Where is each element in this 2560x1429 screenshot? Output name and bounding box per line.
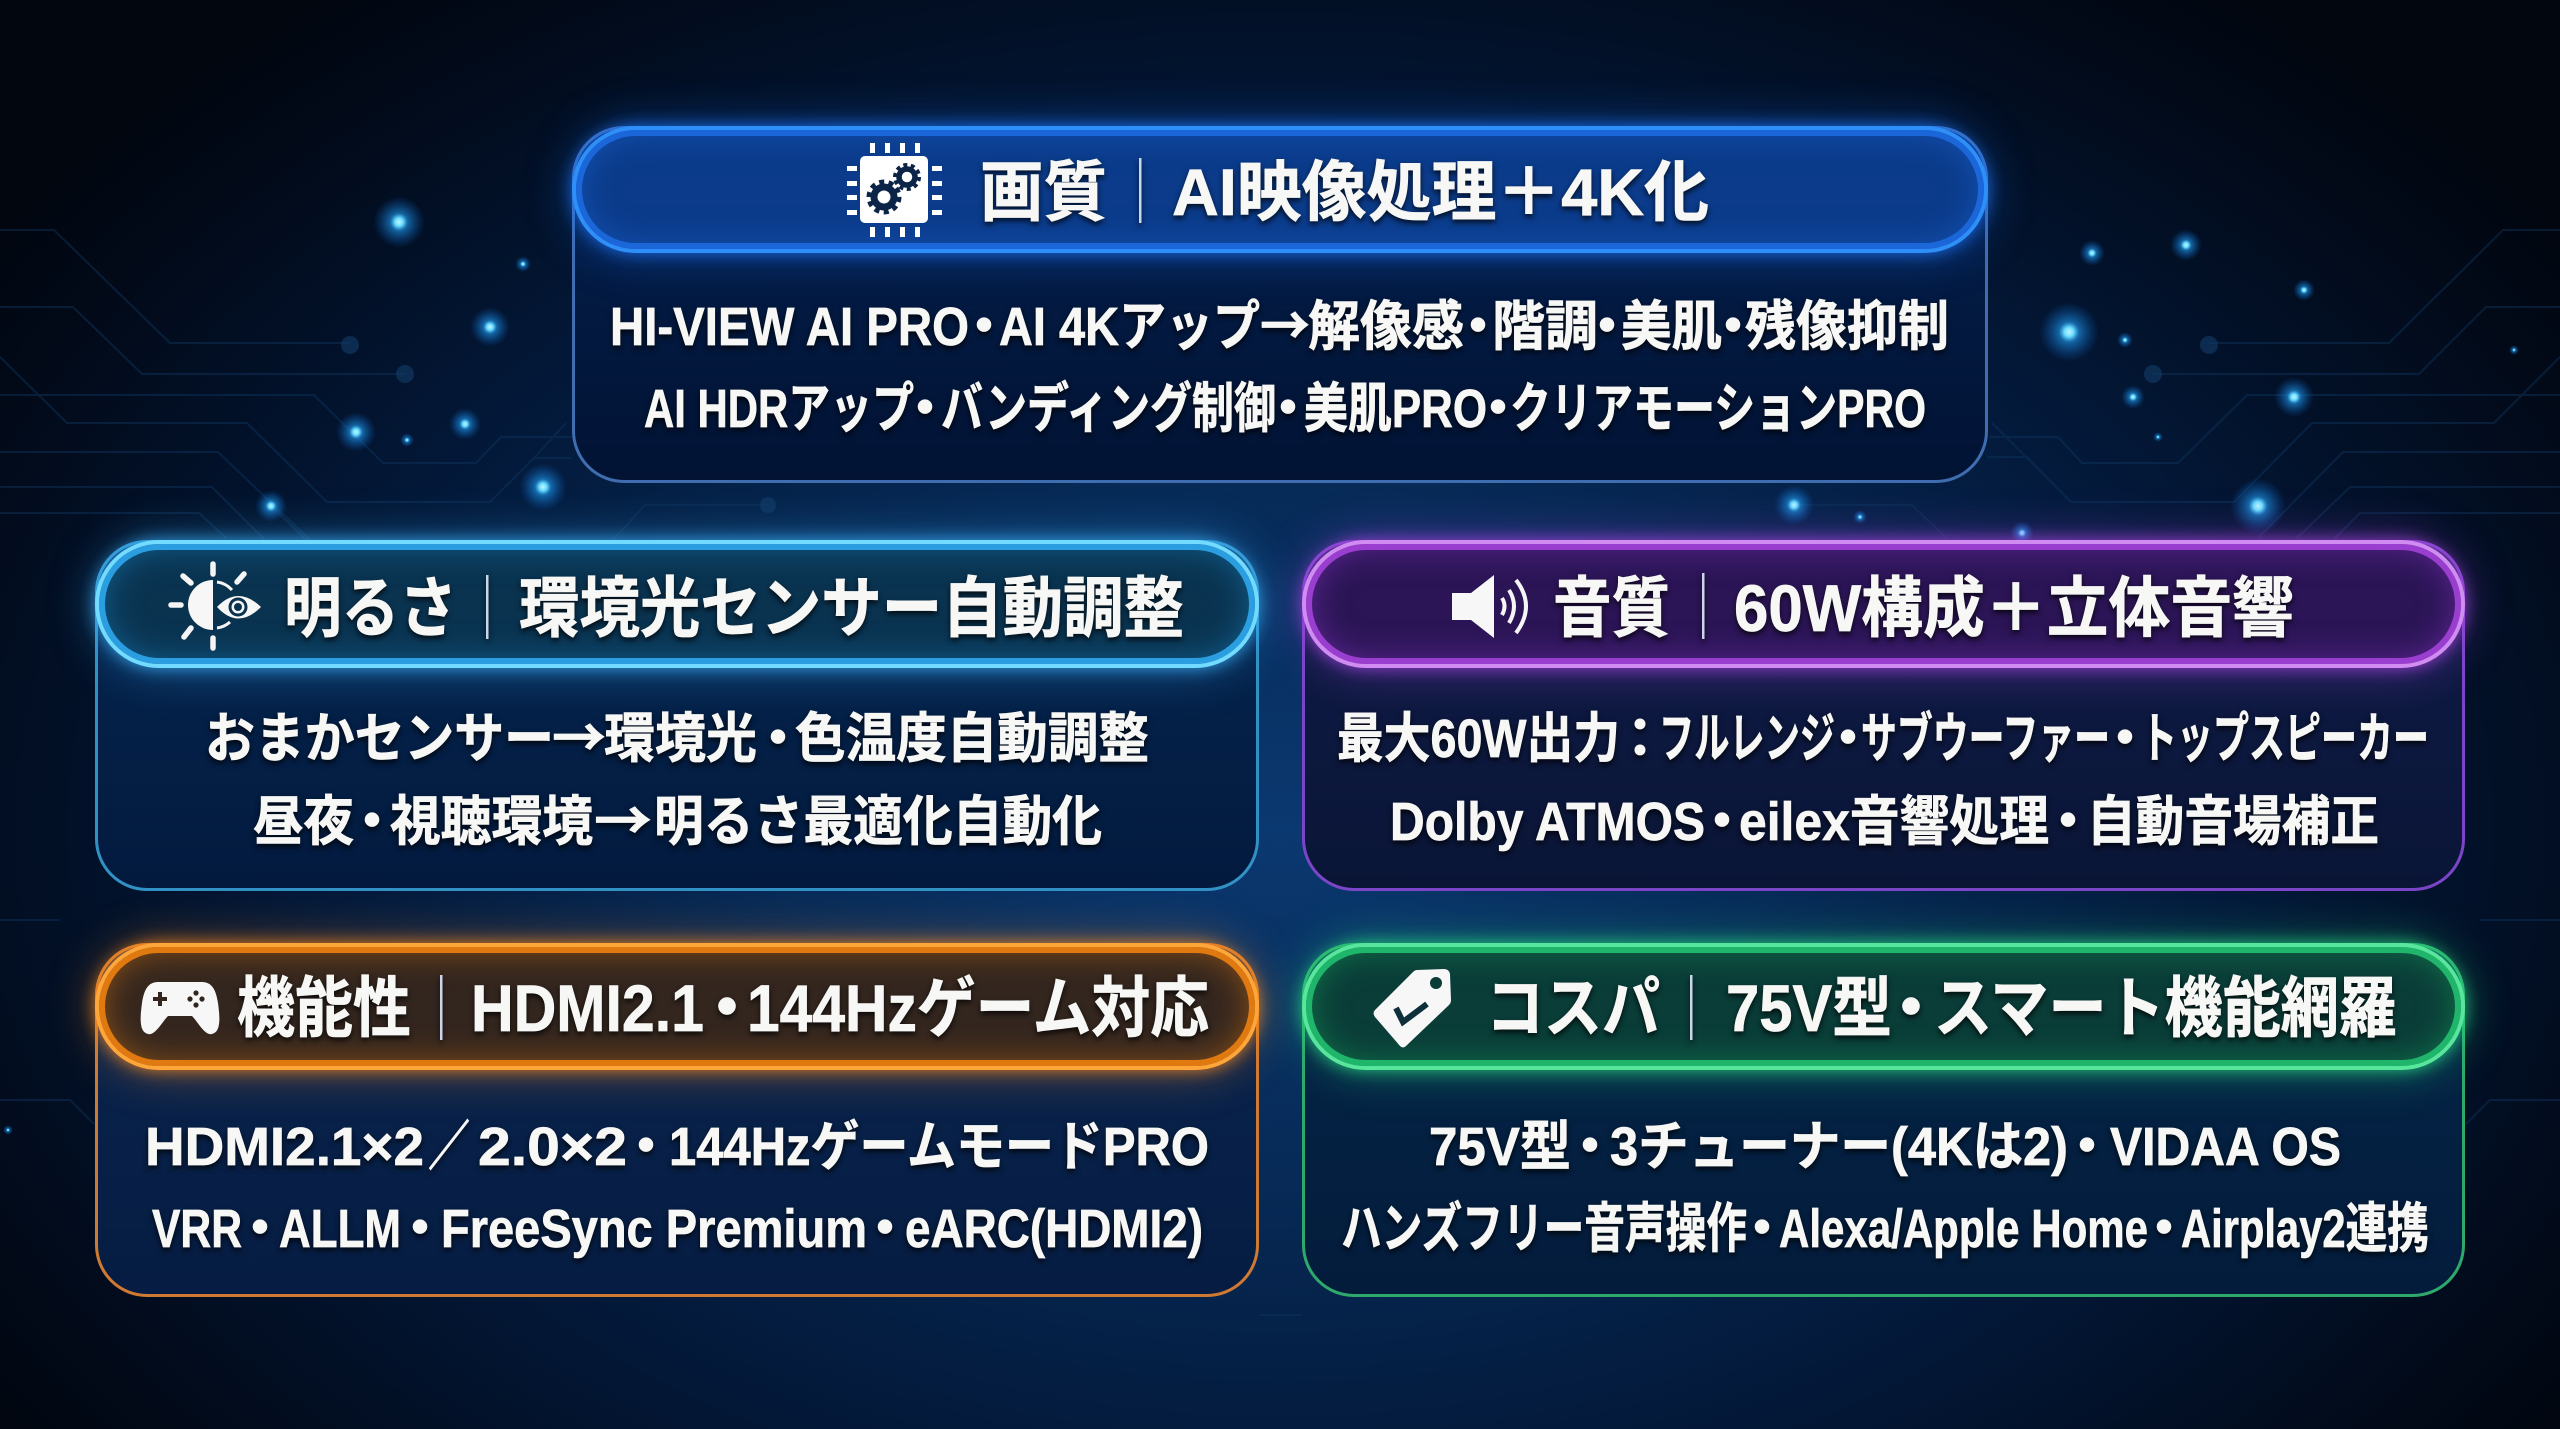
heading and body text: 音質: 60W構成＋立体音響: [1734, 571, 2294, 645]
heading and body text: 画質: 解像感: [1308, 297, 1464, 357]
heading and body text: 明るさ: 環境光: [604, 709, 757, 769]
heading and body text: 画質: 美肌PRO: [1304, 379, 1487, 439]
heading and body text: 画質: ・: [898, 379, 952, 439]
heading and body text: コスパ: VIDAA OS: [2110, 1117, 2341, 1177]
icon: price tag with check: [1374, 969, 1451, 1048]
heading and body text: 画質: 画質: [980, 155, 1107, 229]
heading and body text: 機能性: ・: [858, 1199, 912, 1259]
heading and body text: コスパ: Airplay2連携: [2181, 1199, 2429, 1259]
heading and body text: 機能性: ・: [393, 1199, 447, 1259]
heading and body text: コスパ: 3チューナー(4Kは2): [1610, 1117, 2068, 1177]
panel: 明るさ brightness: [95, 540, 1259, 891]
heading and body text: 機能性: ・: [694, 971, 760, 1045]
heading and body text: 画質: 階調: [1492, 297, 1598, 357]
heading and body text: コスパ: 75V型: [1726, 971, 1892, 1045]
heading and body text: コスパ: ハンズフリー音声操作: [1341, 1199, 1747, 1259]
panel: コスパ value: [1302, 943, 2465, 1297]
heading and body text: 画質: →: [1260, 282, 1310, 361]
heading and body text: 明るさ: 明るさ: [284, 571, 457, 645]
heading and body text: 明るさ: ・: [751, 709, 805, 769]
heading and body text: 機能性: 2.0×2: [478, 1117, 627, 1177]
heading and body text: 画質: 美肌: [1621, 297, 1722, 357]
icon: game controller: [140, 982, 220, 1034]
heading and body text: 音質: Dolby ATMOS: [1390, 792, 1705, 852]
heading and body text: 機能性: HDMI2.1×2: [145, 1117, 424, 1177]
heading and body text: 音質: ・: [2098, 709, 2152, 769]
heading and body text: 機能性: 機能性: [237, 971, 411, 1045]
header bar: 画質: [572, 126, 1988, 253]
heading and body text: 音質: サブウーファー: [1861, 709, 2110, 769]
heading and body text: 機能性: ALLM: [279, 1199, 401, 1259]
heading and body text: コスパ: ・: [2060, 1117, 2114, 1177]
heading and body text: 音質: [1337, 571, 2429, 856]
heading and body text: コスパ: ・: [2137, 1199, 2191, 1259]
heading and body text: コスパ: 75V型: [1429, 1117, 1571, 1177]
heading and body text: コスパ: ・: [1878, 971, 1944, 1045]
panel: 音質 sound: [1302, 540, 2465, 891]
heading and body text: 画質: ・: [1580, 297, 1634, 357]
heading and body text: 機能性: ・: [233, 1199, 287, 1259]
heading and body text: 音質: ・: [1695, 792, 1749, 852]
heading and body text: 機能性: 144HzゲームモードPRO: [669, 1117, 1209, 1177]
heading and body text: 明るさ: 視聴環境: [390, 792, 593, 852]
heading and body text: 明るさ: ・: [345, 792, 399, 852]
panel: 機能性 features: [95, 943, 1259, 1297]
heading and body text: 画質: AI HDRアップ: [644, 379, 914, 439]
heading and body text: コスパ: [1341, 971, 2430, 1264]
heading and body text: 機能性: HDMI2.1: [471, 971, 704, 1045]
heading and body text: 画質: クリアモーションPRO: [1510, 379, 1926, 439]
heading and body text: 明るさ: 色温度自動調整: [795, 709, 1149, 769]
header bar: コスパ: [1302, 943, 2465, 1070]
heading and body text: 画質: バンディング制御: [941, 379, 1276, 439]
heading and body text: 機能性: FreeSync Premium: [441, 1199, 867, 1259]
heading and body text: コスパ: Alexa/Apple Home: [1779, 1199, 2148, 1259]
icon: speaker: [1452, 575, 1528, 638]
header bar: 明るさ: [95, 540, 1259, 668]
heading and body text: 音質: 自動音場補正: [2087, 792, 2379, 852]
heading and body text: 音質: ：: [1613, 709, 1667, 769]
heading and body text: 音質: 最大60W出力: [1337, 709, 1620, 769]
heading and body text: 画質: HI-VIEW AI PRO: [610, 297, 969, 357]
heading and body text: 機能性: eARC(HDMI2): [905, 1199, 1203, 1259]
heading and body text: 画質: ・: [1471, 379, 1525, 439]
heading and body text: 画質: AI 4Kアップ: [999, 297, 1260, 357]
heading and body text: コスパ: コスパ: [1486, 971, 1660, 1045]
heading and body text: 音質: 音質: [1553, 571, 1670, 645]
heading and body text: 画質: ・: [957, 297, 1011, 357]
heading and body text: 明るさ: 明るさ最適化自動化: [654, 792, 1102, 852]
heading and body text: 明るさ: おまかセンサー: [205, 709, 554, 769]
header bar: 音質: [1302, 540, 2465, 668]
icon: AI chip with gears: [847, 143, 942, 237]
icon: sun with eye: [168, 561, 261, 651]
heading and body text: 機能性: VRR: [152, 1199, 242, 1259]
heading and body text: 画質: AI映像処理＋4K化: [1172, 155, 1709, 229]
panel: 画質 picture quality: [572, 126, 1988, 483]
header bar: 機能性: [95, 943, 1259, 1070]
heading and body text: 明るさ: [205, 571, 1184, 856]
heading and body text: 音質: eilex音響処理: [1739, 792, 2049, 852]
heading and body text: 明るさ: 昼夜: [253, 792, 354, 852]
heading and body text: 画質: ・: [1451, 297, 1505, 357]
heading and body text: 機能性: ／: [428, 1117, 470, 1177]
heading and body text: 機能性: 144Hzゲーム対応: [747, 971, 1209, 1045]
heading and body text: 機能性: ・: [619, 1117, 673, 1177]
heading and body text: 音質: ・: [1821, 709, 1875, 769]
heading and body text: 明るさ: 環境光センサー自動調整: [519, 571, 1184, 645]
heading and body text: 画質: ・: [1706, 297, 1760, 357]
heading and body text: コスパ: ・: [1563, 1117, 1617, 1177]
heading and body text: 音質: フルレンジ: [1659, 709, 1835, 769]
heading and body text: コスパ: スマート機能網羅: [1934, 971, 2397, 1045]
heading and body text: 機能性: [145, 971, 1210, 1264]
heading and body text: 画質: ・: [1261, 379, 1315, 439]
heading and body text: 画質: 残像抑制: [1745, 297, 1949, 357]
heading and body text: 明るさ: →: [552, 694, 606, 773]
heading and body text: 明るさ: →: [594, 777, 652, 856]
heading and body text: 音質: ・: [2041, 792, 2095, 852]
heading and body text: 画質: [610, 155, 1949, 439]
heading and body text: コスパ: ・: [1735, 1199, 1789, 1259]
